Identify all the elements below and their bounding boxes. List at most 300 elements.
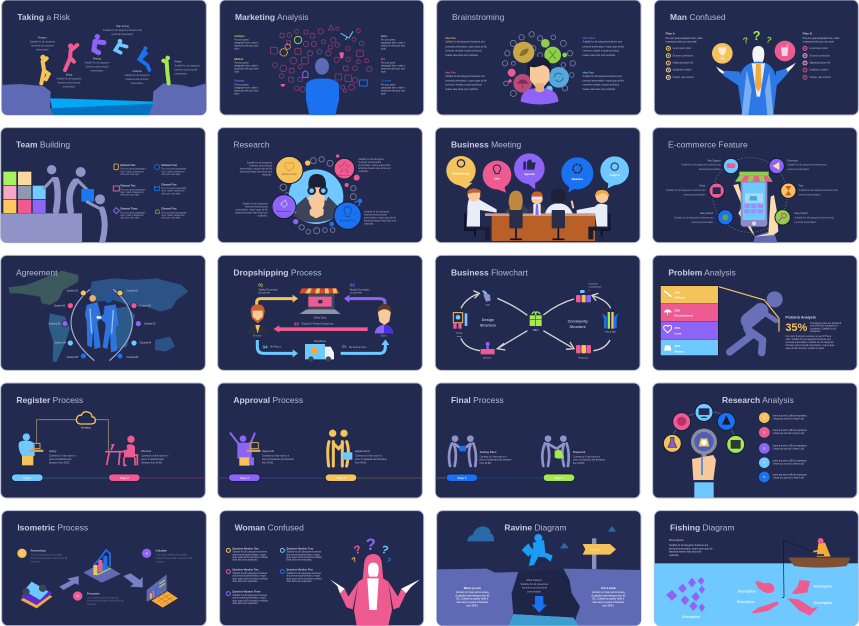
text: promotion bbox=[787, 159, 827, 171]
panel: Problem Analysis bbox=[653, 255, 857, 370]
icon: cone bbox=[717, 412, 735, 430]
question list right: quae quae ab illo inventore veritatis bbox=[286, 556, 323, 559]
text left bottom: presentation, neque quae ab illo bbox=[236, 208, 268, 211]
badge: researching bbox=[17, 549, 68, 563]
platform bbox=[1, 213, 82, 243]
left text column: Put your great bbox=[234, 39, 249, 42]
question list left: Suitable for all categories business bbox=[232, 594, 268, 597]
text: fast: Fast bbox=[799, 185, 804, 188]
panel: Man Confused bbox=[654, 0, 858, 115]
text: review: piece of classical Latin bbox=[141, 458, 165, 461]
bubble: element two bbox=[334, 158, 355, 179]
text: news bbox=[666, 186, 706, 197]
text: news: personal presentation bbox=[684, 194, 706, 197]
question list right: Suitable for all categories business bbox=[286, 572, 322, 575]
left text column: Analysis bbox=[234, 35, 245, 38]
analysis body text: business and personal presentation, neque quae bbox=[786, 344, 835, 347]
text: playing: Suitable for all categories bbox=[84, 61, 111, 64]
text: review: Contrary to it has roots in a bbox=[141, 455, 169, 458]
question list left: Question Number Three bbox=[232, 591, 261, 594]
icon: interactive communication: n bbox=[589, 290, 590, 292]
figure: help giving bbox=[115, 39, 127, 53]
title: Business Flowchart bbox=[451, 267, 529, 277]
question list left: vitae dicta sunt explicabo. bbox=[232, 602, 258, 605]
nodes bbox=[62, 290, 141, 359]
ideas right: inventore veritatis et quasi architecto bbox=[583, 84, 620, 87]
numbered list: Insert any text to fill the emptiness. bbox=[773, 445, 808, 448]
awning bbox=[735, 172, 773, 182]
panel: Final Process bbox=[435, 383, 640, 498]
question list left: Question Number One bbox=[232, 547, 259, 550]
plan B list: it awesome with your own style. bbox=[803, 40, 835, 43]
text: apply: Apply bbox=[49, 449, 57, 453]
question list right: Suitable for all categories business bbox=[286, 551, 322, 554]
badge: forecaster: Your lesson quickly and quickly, bbox=[87, 596, 119, 599]
text: apply: literature from 45 BC. bbox=[49, 461, 71, 464]
person below bbox=[87, 194, 105, 243]
title: Agreement bbox=[16, 267, 58, 277]
plan A list: Adipiscing dolore elit bbox=[673, 62, 694, 65]
step 4 pill bbox=[325, 474, 357, 481]
doodle ring bbox=[502, 32, 575, 96]
right labels: Content 01 bbox=[127, 289, 139, 292]
left text column: paragraph here, make it bbox=[234, 64, 259, 67]
step 02: on your site bbox=[350, 291, 362, 294]
left text column: Method bbox=[234, 58, 244, 61]
online shop laptop: Online Shop bbox=[314, 318, 327, 320]
text: giving files: Contrary to it has roots in a bbox=[480, 455, 507, 458]
question marks: ? bbox=[366, 535, 376, 554]
title: Marketing Analysis bbox=[235, 12, 309, 22]
accent dots bbox=[293, 154, 362, 226]
text: help giving: Suitable for all categories business and bbox=[103, 29, 143, 32]
numbered list: I know you can do it, keep it up! bbox=[773, 477, 805, 480]
analysis body text: calls. Suitable for all categories business and bbox=[786, 338, 831, 341]
text left top: presentation, neque quae ab illo bbox=[240, 167, 273, 170]
calculator bbox=[151, 591, 179, 608]
icon: design team bbox=[453, 313, 466, 338]
briefcase bbox=[342, 452, 352, 460]
text: approval: Approval bbox=[262, 449, 274, 453]
text: giving files: Giving Files bbox=[480, 450, 497, 454]
signpost: Success bbox=[590, 548, 602, 552]
badge: forecaster: 02 bbox=[76, 596, 80, 598]
text: you're goals: BC. Contrary to popular belief it bbox=[593, 598, 624, 601]
figure: approval bbox=[230, 433, 260, 466]
analysis body text: personal presentation. Suitable for all categories bbox=[786, 341, 835, 344]
text: risk failure bbox=[520, 578, 549, 593]
boat bbox=[788, 558, 851, 568]
bubble: element three: Element Three bbox=[277, 210, 292, 213]
right text column: style. bbox=[381, 48, 387, 51]
left cliff bbox=[2, 84, 54, 115]
badge: calculate: Powerful presentation material for all bbox=[156, 557, 193, 560]
stacked bars: Military bbox=[674, 296, 685, 300]
element list: Put your great paragraph bbox=[120, 188, 146, 191]
left labels: Content 03 bbox=[49, 323, 61, 326]
text: promotion: Suitable for all categories business and bbox=[787, 163, 827, 166]
text: easy search right: Easy Search bbox=[795, 212, 809, 215]
text: agreement: from 45 BC. bbox=[355, 461, 367, 464]
businessman bbox=[716, 46, 796, 115]
analysis body text: categories bbox=[810, 330, 821, 333]
icon ring bbox=[280, 157, 360, 234]
left text column: Put your great bbox=[234, 83, 249, 86]
sending label: Sending bbox=[81, 426, 91, 430]
element list bbox=[113, 164, 187, 220]
timeline bbox=[435, 476, 447, 479]
file box bbox=[459, 446, 466, 451]
element list: Put your great paragraph bbox=[120, 168, 146, 171]
badge: forecaster bbox=[73, 591, 124, 606]
analysis body text: quae ab illo inventore veritatis et quasi bbox=[786, 347, 824, 350]
badge: researching: Researching bbox=[31, 550, 46, 553]
panel: Team Building bbox=[1, 128, 205, 243]
isometric chart bbox=[83, 550, 121, 583]
question list left: and personal presentation, neque bbox=[232, 553, 267, 556]
icon: design team: team bbox=[457, 335, 462, 338]
text right top bbox=[358, 158, 391, 173]
numbered list: I know you can do it, keep it up! bbox=[773, 448, 805, 451]
text: finish: presentation bbox=[175, 72, 188, 75]
text left top: laboriosa beatae vitae dicta sunt bbox=[240, 170, 272, 173]
text: payment: Payment bbox=[573, 450, 585, 454]
right labels bbox=[127, 289, 156, 359]
title: Problem Analysis bbox=[668, 267, 736, 277]
panel: Business Meeting bbox=[435, 128, 640, 243]
bubble: maintains: Maintains bbox=[572, 178, 584, 181]
text: finish: Suitable for all categories bbox=[175, 64, 201, 67]
question marks: ? bbox=[353, 544, 363, 557]
element list: with your own style. bbox=[120, 173, 140, 176]
numbered list: 5 bbox=[764, 476, 766, 479]
stacked bars: Environment bbox=[674, 314, 693, 318]
right text column: Put your great bbox=[381, 39, 396, 42]
handshake figures bbox=[85, 295, 119, 352]
figure: review bbox=[105, 436, 137, 465]
sleeve bbox=[753, 232, 778, 242]
text: agreement: Agreement bbox=[355, 449, 370, 453]
person helping bbox=[69, 167, 87, 211]
step 05 label bbox=[342, 344, 366, 349]
bubble: element four bbox=[334, 202, 361, 229]
text: agreement: piece of classical Latin literature bbox=[355, 458, 388, 461]
step 3 pill bbox=[229, 474, 260, 481]
description: personal presentation, neque quae quae ab bbox=[669, 547, 713, 550]
description labels bbox=[682, 584, 832, 619]
text: fast support: Suitable for all categories business and bbox=[682, 163, 721, 166]
ideas right: personal presentation, neque quae ab illo bbox=[583, 79, 625, 82]
ideas left: beatae vitae dicta sunt explicabo. bbox=[445, 88, 479, 91]
ideas left: Idea One bbox=[445, 37, 456, 40]
icon: interactive communication bbox=[576, 282, 602, 302]
block stack bbox=[3, 172, 46, 213]
panel: Ravine Diagram bbox=[437, 511, 641, 626]
badge: researching: business bbox=[31, 561, 40, 563]
description: explicabo. bbox=[669, 555, 680, 557]
step 05 label: We Send an Item bbox=[349, 346, 366, 349]
bubble: analysis: Analysis bbox=[610, 174, 620, 177]
figure: giving files bbox=[449, 435, 476, 466]
pink fish bbox=[752, 580, 819, 616]
icon: search blue bbox=[718, 210, 733, 225]
bubble: element four: Element Four bbox=[340, 219, 356, 222]
step 04 label: 04 bbox=[263, 344, 268, 349]
ideas left: beatae vitae dicta sunt explicabo. bbox=[445, 54, 479, 57]
badge: researching: 01 bbox=[21, 553, 24, 555]
text: doing: Doing bbox=[66, 73, 73, 76]
question marks: ? bbox=[350, 555, 359, 565]
left text column: awesome with your own bbox=[234, 89, 259, 92]
ideas right: Idea Three bbox=[583, 37, 596, 40]
numbered list: I know you can do it, keep it up! bbox=[773, 432, 805, 435]
plan B list: Incididunt ut labore bbox=[809, 69, 829, 72]
big number: 35% bbox=[785, 322, 808, 334]
phone bbox=[741, 180, 767, 227]
badge: calculate bbox=[142, 549, 193, 563]
icon: offer gift: Offer bbox=[533, 328, 539, 332]
text: help giving: Help Giving bbox=[116, 25, 129, 28]
ideas right: beatae vitae dicta sunt explicabo. bbox=[583, 54, 616, 57]
plan A list: Veniam, quis nostrud bbox=[673, 76, 694, 79]
text: prepare: presentation bbox=[36, 49, 49, 52]
buyer bbox=[375, 304, 393, 337]
idea bubbles bbox=[508, 39, 569, 93]
text: payment bbox=[573, 450, 606, 465]
left labels: Content 05 bbox=[67, 356, 79, 359]
text: easy search left bbox=[674, 212, 714, 224]
panel: Marketing Analysis bbox=[220, 0, 424, 115]
question list left bbox=[226, 547, 269, 605]
question marks: ? bbox=[742, 35, 750, 46]
icon: tools: Tools bbox=[485, 304, 490, 306]
cliffs bbox=[437, 569, 641, 626]
description: laboriosa beatae vitae dicta sunt bbox=[669, 551, 702, 554]
plan A list: Lorem ipsum dolor bbox=[673, 47, 692, 50]
text: prepare: Prepare bbox=[38, 37, 47, 40]
bubble: element one: Element One bbox=[282, 173, 298, 176]
title: Ravine Diagram bbox=[504, 523, 567, 533]
panel: Agreement bbox=[1, 255, 205, 370]
text: easy search right bbox=[795, 212, 835, 224]
text: where you are: from 45 BC. bbox=[466, 604, 479, 607]
title: Taking a Risk bbox=[17, 12, 71, 22]
fisherman bbox=[813, 538, 831, 557]
figure: prepare bbox=[40, 55, 49, 83]
panel: Isometric Process bbox=[2, 511, 206, 626]
step 1 pill: Step 1 bbox=[23, 476, 32, 480]
stacked bars bbox=[660, 285, 719, 356]
text: fast bbox=[799, 185, 839, 197]
text right bottom bbox=[364, 211, 397, 226]
question marks: ? bbox=[765, 34, 773, 45]
left text column: style. bbox=[234, 70, 240, 73]
description: Suitable for all categories business and bbox=[669, 544, 709, 547]
figure: payment bbox=[542, 435, 569, 466]
arrow 03 bbox=[273, 325, 368, 333]
text right top: laboriosa beatae vitae dicta sunt bbox=[358, 167, 391, 170]
person right bbox=[577, 190, 609, 239]
bubble: idea bbox=[483, 161, 511, 193]
text: you're goals: has roots in a piece of literature bbox=[593, 601, 625, 604]
badge: forecaster: Powerful presentation material for all bbox=[87, 600, 124, 603]
panel: E-commerce Feature bbox=[653, 128, 857, 243]
numbered list: Insert any text to fill the emptiness. bbox=[773, 459, 808, 462]
element list: Element Five bbox=[161, 183, 177, 186]
element list: here, make it awesome bbox=[161, 170, 185, 173]
timeline bbox=[218, 476, 327, 479]
icon: why and who: Why & Who bbox=[605, 332, 617, 334]
title: Man Confused bbox=[670, 12, 726, 22]
step 03 label: 03 bbox=[294, 321, 299, 326]
problem analysis heading: Problem Analysis bbox=[785, 315, 816, 319]
pulling figure bbox=[730, 291, 783, 353]
bubble: analysis bbox=[600, 156, 629, 188]
text: you're goals: from 45 BC. bbox=[602, 604, 615, 607]
step 1 pill bbox=[12, 474, 43, 481]
person centre bbox=[527, 191, 547, 215]
text: news: Suitable for all categories business and bbox=[666, 189, 706, 192]
description bbox=[669, 538, 713, 557]
figure: finish bbox=[163, 56, 170, 83]
online shop laptop bbox=[299, 288, 341, 320]
question marks: ? bbox=[380, 544, 390, 557]
question list left: Suitable for all categories business bbox=[232, 572, 268, 575]
right text column bbox=[381, 35, 406, 95]
numbered list: 1 bbox=[764, 417, 766, 420]
text: finish: Finish bbox=[175, 60, 182, 63]
figure: analysis bbox=[139, 46, 149, 70]
badge: calculate: Your lesson quickly and quickly, bbox=[156, 554, 188, 557]
title: Team Building bbox=[16, 140, 70, 150]
text: approval: Contrary to it has roots in a bbox=[262, 455, 290, 458]
icon cloud bbox=[271, 25, 372, 92]
down arrow bbox=[532, 596, 547, 613]
element list: here, make it awesome bbox=[120, 191, 144, 194]
icon: why and who bbox=[602, 312, 619, 334]
right text column: awesome with your own bbox=[381, 45, 406, 48]
stacked bars: 35% bbox=[674, 344, 681, 348]
element list: Element One bbox=[120, 164, 136, 167]
laptop screen chart bbox=[147, 574, 167, 602]
text: prepare bbox=[30, 37, 56, 52]
text: you're goals: You're Goals bbox=[601, 587, 616, 590]
text: where you are: Where you are bbox=[464, 587, 482, 590]
text: prepare: Suitable for all categories bbox=[30, 41, 56, 44]
title: Business Meeting bbox=[451, 140, 522, 150]
step 03 label bbox=[294, 321, 334, 326]
text: analysis: presentation bbox=[131, 82, 144, 85]
step 4 pill: Step 4 bbox=[337, 476, 346, 480]
figure: apply bbox=[19, 433, 43, 465]
text right top: presentation, neque quae ab illo bbox=[358, 164, 391, 167]
element list: with your own style. bbox=[161, 217, 181, 220]
text: finish bbox=[175, 60, 201, 75]
text: risk failure: business and personal bbox=[522, 587, 547, 590]
analysis body text: completed. Suitable for all bbox=[810, 327, 836, 330]
hand bbox=[692, 455, 716, 499]
delivery truck bbox=[305, 340, 334, 362]
character with binoculars bbox=[293, 174, 340, 222]
text: where you are: Contrary to it has roots in a piece bbox=[456, 591, 490, 594]
ideas left: personal presentation, neque quae ab illo bbox=[445, 45, 487, 48]
money bag bbox=[555, 450, 564, 459]
text: easy search left: Suitable for all categories business and bbox=[674, 216, 714, 219]
text: where you are: BC. Contrary to popular belief it bbox=[457, 598, 488, 601]
ideas left: inventore veritatis et quasi architecto bbox=[445, 50, 483, 53]
right text column: paragraph here, make it bbox=[381, 86, 405, 89]
text: you're goals: Contrary to it has roots in a piece bbox=[592, 591, 626, 594]
text: playing: Playing bbox=[93, 57, 102, 60]
numbered list bbox=[759, 412, 808, 482]
panel: Brainstorming bbox=[437, 0, 641, 115]
text left top: Suitable for all categories bbox=[247, 161, 273, 164]
cloud large bbox=[467, 527, 494, 541]
title: Research bbox=[233, 140, 270, 150]
question list right: and personal presentation, neque bbox=[286, 575, 321, 578]
timeline bbox=[43, 476, 110, 479]
text left bottom: explicabo. bbox=[258, 215, 268, 217]
question list left: vitae dicta sunt explicabo. bbox=[232, 580, 258, 583]
text: fast: personal presentation bbox=[799, 194, 821, 197]
left text column: awesome with your own bbox=[234, 45, 259, 48]
question list right: and personal presentation, neque bbox=[286, 553, 321, 556]
element list: Element Two bbox=[120, 185, 136, 188]
person from behind bbox=[545, 188, 573, 239]
arrow 01 bbox=[257, 295, 298, 305]
left labels: Content 04 bbox=[54, 342, 66, 345]
text: you're goals: of classical Latin literature from 45 bbox=[591, 594, 626, 597]
step 04 label: We Pay us bbox=[270, 346, 282, 348]
description labels: Description bbox=[682, 615, 700, 619]
plan A list: Plan A bbox=[666, 32, 676, 36]
plan B list: Sit amet consectetur bbox=[809, 54, 830, 57]
isometric binoculars bbox=[21, 582, 52, 608]
text: approval bbox=[262, 449, 295, 464]
text left top bbox=[240, 161, 273, 176]
badge: researching: Powerful presentation material for all bbox=[31, 557, 68, 560]
right labels: Content 02 bbox=[139, 304, 151, 307]
step 5 pill bbox=[446, 474, 478, 481]
icon: globe bbox=[673, 413, 691, 431]
arrow 05 bbox=[341, 339, 389, 353]
text: analysis: business and personal bbox=[126, 78, 149, 81]
right text column: paragraph here, make it bbox=[381, 64, 405, 67]
question list left: and personal presentation, neque bbox=[232, 575, 267, 578]
figure: agreement bbox=[328, 430, 348, 466]
left labels: Content 02 bbox=[54, 304, 66, 307]
text: help giving: personal presentation bbox=[112, 33, 134, 36]
element list: Put your great paragraph bbox=[120, 211, 146, 214]
text: risk failure: Suitable for all categories bbox=[520, 583, 549, 586]
element list: here, make it awesome bbox=[120, 170, 144, 173]
retailer bbox=[247, 304, 268, 337]
label: community structure bbox=[568, 320, 589, 329]
title: Fishing Diagram bbox=[670, 523, 735, 533]
label: design structure: Structure bbox=[480, 323, 496, 327]
analysis body text: and before the transaction is bbox=[810, 325, 839, 328]
numbered list: 3 bbox=[764, 447, 766, 450]
hand bbox=[733, 184, 778, 237]
ideas left: personal presentation, neque quae ab illo bbox=[445, 79, 487, 82]
text left bottom: business and personal bbox=[245, 205, 268, 208]
panel: Research bbox=[218, 128, 422, 243]
question list right bbox=[280, 547, 323, 583]
icon: chat bbox=[723, 158, 739, 174]
icon bubble: wine bbox=[712, 43, 733, 64]
highlighted icons bbox=[280, 31, 367, 87]
question list left: quae quae ab illo inventore veritatis bbox=[232, 577, 269, 580]
